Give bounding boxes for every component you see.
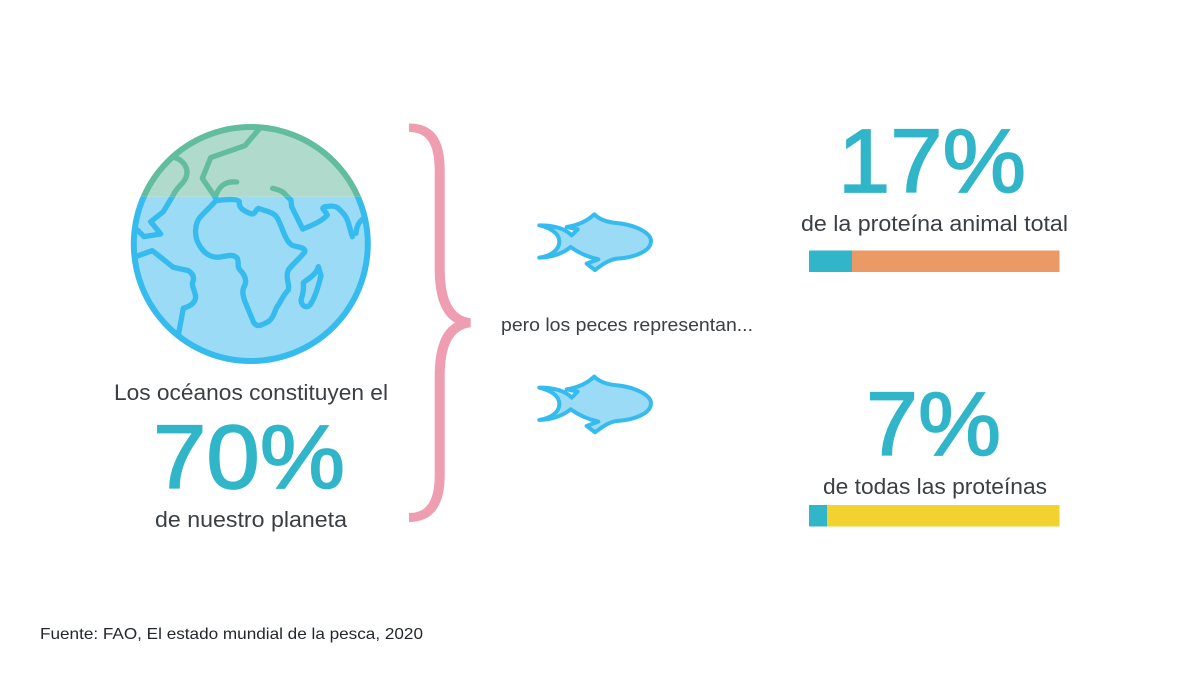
number: 17%: 17% [838, 112, 1026, 212]
text: but fish represent: pero los peces representan... [501, 315, 753, 335]
icon: globe [134, 127, 368, 361]
number: 70%: 70% [153, 408, 345, 508]
number: 7%: 7% [866, 375, 1001, 475]
icon: curly brace [409, 124, 471, 522]
text: of all proteins: de todas las proteínas [823, 474, 1047, 499]
text: oceans intro: Los océanos constituyen el [114, 380, 388, 405]
icon: fish top [539, 214, 651, 270]
bar chart: 7 percent [809, 505, 1060, 526]
source note: Fuente: FAO, El estado mundial de la pesca, 2020 [40, 626, 423, 643]
text: of our planet: de nuestro planeta [155, 507, 348, 532]
infographic canvas [41, 124, 1066, 642]
text: of total animal protein: de la proteína animal total [801, 211, 1068, 236]
bar chart: 17 percent [809, 250, 1060, 272]
icon: fish bottom [539, 377, 651, 432]
